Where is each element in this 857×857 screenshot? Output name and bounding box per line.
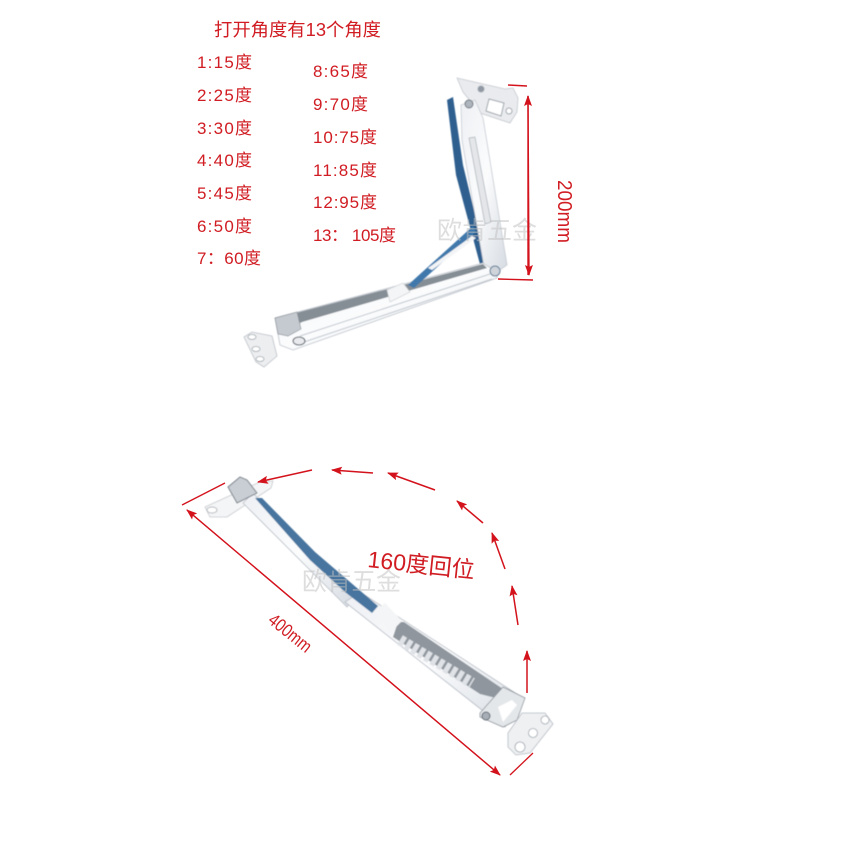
angle list column 2: 8:65度 [313, 62, 368, 81]
angle list column 1: 7：60度 [197, 249, 261, 268]
rivet [293, 337, 305, 345]
top hinge, opened [244, 78, 518, 367]
upper mounting plate [205, 481, 273, 517]
end of arm block [275, 312, 301, 336]
bottom hinge, flat [205, 477, 553, 755]
angle list column 2: 12:95度 [313, 193, 377, 212]
angle list column 1: 2:25度 [197, 86, 252, 105]
length dimension 400mm [182, 483, 533, 775]
lower arm channel [393, 622, 503, 698]
plate holes [248, 334, 264, 362]
horizontal arm body [275, 263, 497, 350]
angle list column 1: 4:40度 [197, 151, 252, 170]
angle list column 1: 3:30度 [197, 119, 252, 138]
lower mounting plate [508, 713, 553, 755]
end frame [480, 687, 525, 727]
horizontal arm channel [292, 264, 487, 326]
ratchet teeth [400, 640, 472, 683]
white slider [387, 283, 410, 302]
angle list column 1: 5:45度 [197, 184, 252, 203]
lower arm body [345, 592, 523, 727]
bottom mounting plate [244, 332, 277, 367]
vertical arm [461, 100, 507, 272]
angle list column 2: 10:75度 [313, 128, 377, 147]
top mounting plate [457, 78, 518, 123]
end frame opening [498, 700, 517, 722]
angle list column 2 [313, 62, 396, 245]
upper bracket [228, 477, 257, 503]
upper arm [243, 493, 357, 607]
watermark top: 欧肯五金 [437, 217, 537, 245]
angle list column 1: 6:50度 [197, 217, 252, 236]
hinge pivot [490, 266, 500, 276]
rotation arrows [258, 470, 527, 693]
height dimension 200mm [498, 85, 533, 280]
rail highlight lines [300, 274, 492, 342]
angle list column 2: 9:70度 [313, 95, 368, 114]
angle list column 2: 13： 105度 [313, 226, 396, 245]
label 200mm: 200mm [553, 180, 575, 243]
angle list column 2: 11:85度 [313, 161, 377, 180]
angle list column 1 [197, 53, 261, 268]
white slider [375, 603, 402, 633]
plate hole [207, 507, 217, 513]
angle list column 1: 1:15度 [197, 53, 252, 72]
watermark bottom: 欧肯五金 [302, 568, 401, 596]
title: 打开角度有13个角度 [214, 20, 381, 40]
blue strip upper arm [255, 498, 378, 613]
diagonal strut white side [428, 236, 476, 270]
blue side strip [447, 97, 487, 268]
label 160 degree return: 160度回位 [366, 546, 476, 583]
pivot screw [465, 100, 473, 108]
plate holes [515, 716, 549, 752]
label 400mm: 400mm [264, 610, 316, 657]
rivet [482, 712, 490, 720]
vertical arm slot [469, 137, 491, 224]
plate slot and holes [478, 86, 512, 116]
diagonal strut [408, 226, 476, 288]
